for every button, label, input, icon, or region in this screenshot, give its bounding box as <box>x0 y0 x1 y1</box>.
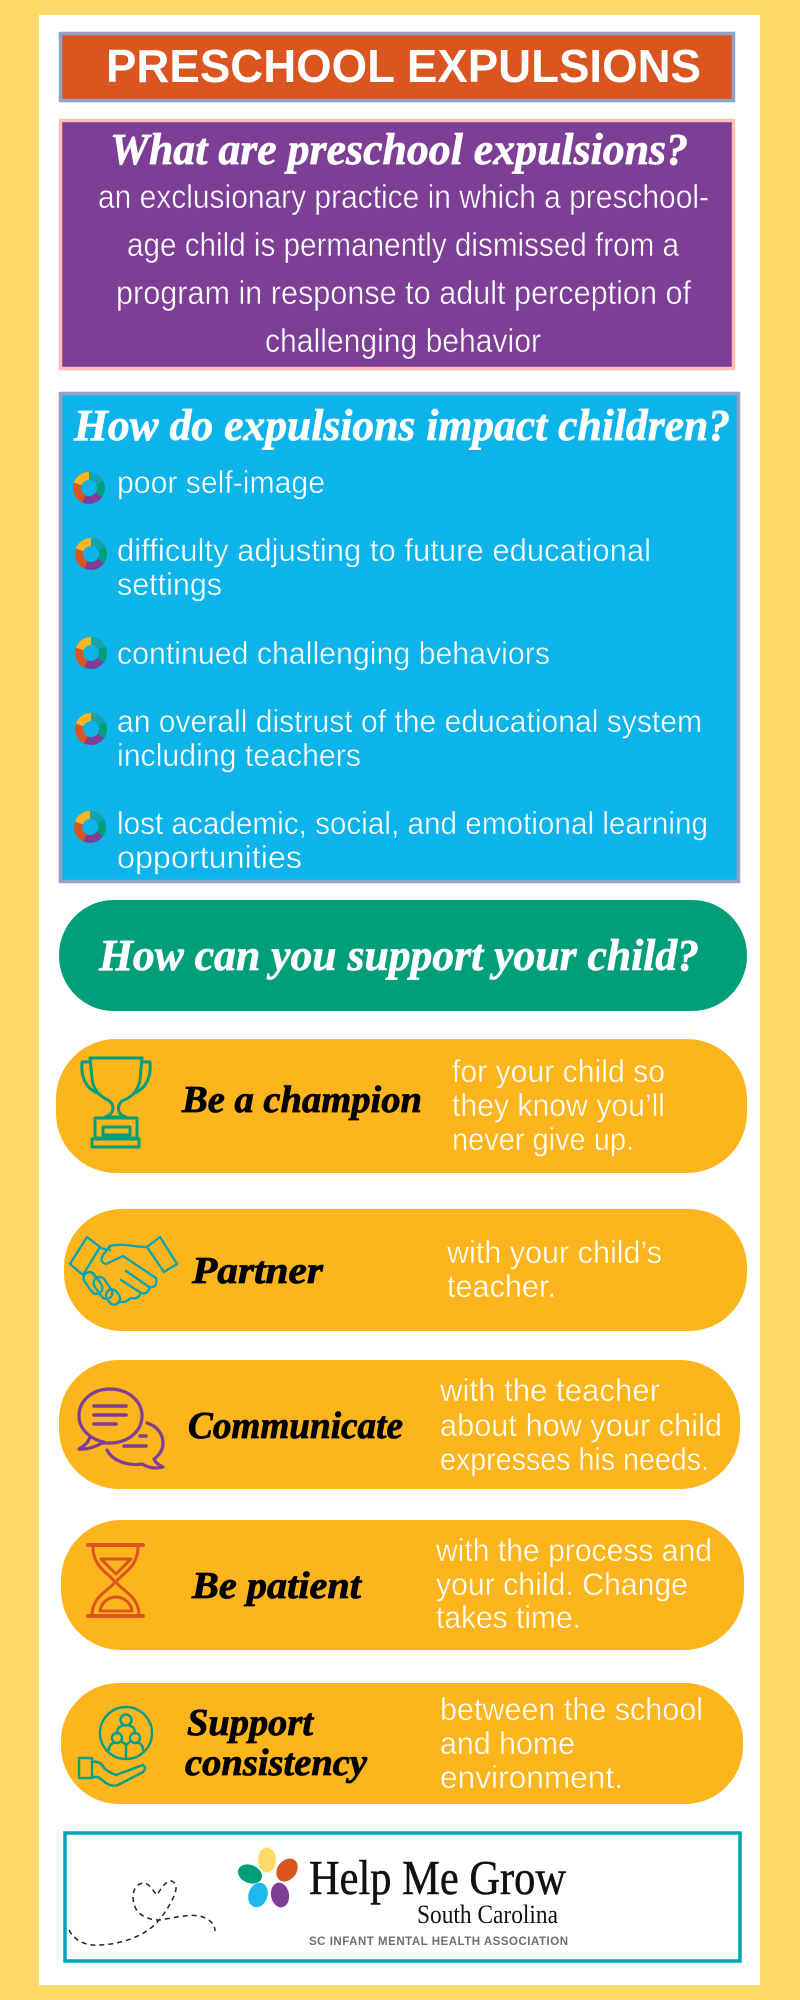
bullet: overall distrust: including teachers <box>117 737 361 773</box>
definition text <box>98 178 709 359</box>
title banner <box>60 34 734 100</box>
logo wordmark <box>309 1850 568 1948</box>
heading: how do expulsions impact children: How do expulsions impact children? <box>73 401 730 450</box>
banner: how can you support your child <box>59 900 747 1011</box>
text: between the school <box>440 1691 703 1795</box>
logo wordmark: SC INFANT MENTAL HEALTH ASSOCIATION <box>309 1936 568 1948</box>
icon: hand holding family <box>79 1707 152 1786</box>
definition text: program in response to adult perception of <box>116 274 692 311</box>
icon: trophy <box>82 1058 150 1147</box>
text: with the teacher: about how your child <box>440 1407 722 1443</box>
label: be patient: Be patient <box>191 1565 363 1607</box>
label: partner: Partner <box>191 1250 324 1292</box>
text: for your child <box>452 1053 665 1157</box>
text: for your child: they know you’ll <box>452 1087 665 1123</box>
label: support consistency <box>185 1702 367 1784</box>
banner: how can you support your child: How can you support your child? <box>98 931 699 980</box>
panel: how do expulsions impact children <box>60 394 738 882</box>
text: between the school: between the school <box>440 1691 703 1727</box>
bullet: overall distrust: an overall distrust of the educational system <box>117 703 702 739</box>
text: with the teacher: expresses his needs. <box>440 1441 709 1477</box>
text: with your child's teacher <box>446 1234 662 1304</box>
panel: footer logo <box>65 1833 740 1961</box>
label: support consistency: consistency <box>185 1742 367 1784</box>
bullet: lost opportunities <box>73 805 708 875</box>
bullet: continued challenging behaviors: continued challenging behaviors <box>117 635 550 671</box>
text: between the school: and home <box>440 1725 575 1761</box>
icon: flower logo <box>235 1848 302 1910</box>
card: be a champion <box>56 1039 747 1173</box>
label: be a champion: Be a champion <box>181 1079 422 1121</box>
definition text: an exclusionary practice in which a preschool- <box>98 178 709 215</box>
text: with the process: with the process and <box>435 1532 712 1568</box>
bullet: overall distrust <box>74 703 702 773</box>
text: with the process: takes time. <box>436 1599 581 1635</box>
icon: handshake <box>70 1237 177 1307</box>
icon: speech bubbles <box>79 1389 163 1468</box>
text: with the process: your child. Change <box>436 1566 688 1602</box>
bullet: poor self-image: poor self-image <box>117 464 325 500</box>
bullet: difficulty adjusting <box>74 532 651 602</box>
bullet: difficulty adjusting: difficulty adjusting to future educational <box>117 532 651 568</box>
bullet: lost opportunities: opportunities <box>117 839 302 875</box>
text: with your child's teacher: with your child’s <box>446 1234 662 1270</box>
card: be patient <box>61 1520 744 1650</box>
bullet: lost opportunities: lost academic, social, and emotional learning <box>117 805 708 841</box>
decoration: dashed heart <box>69 1881 215 1945</box>
text: between the school: environment. <box>440 1759 623 1795</box>
title banner: PRESCHOOL EXPULSIONS <box>106 40 701 92</box>
label: communicate: Communicate <box>188 1405 403 1447</box>
definition text: age child is permanently dismissed from a <box>127 226 680 263</box>
text: with your child's teacher: teacher. <box>447 1268 556 1304</box>
card: communicate <box>59 1360 740 1489</box>
text: with the process <box>435 1532 712 1635</box>
text: for your child: for your child so <box>452 1053 665 1089</box>
card: partner <box>64 1209 747 1331</box>
logo wordmark: Help Me Grow <box>309 1850 567 1905</box>
text: with the teacher <box>439 1372 722 1477</box>
label: support consistency: Support <box>187 1702 314 1744</box>
panel: what are preschool expulsions <box>60 120 734 368</box>
bullet: difficulty adjusting: settings <box>117 566 222 602</box>
icon: hourglass <box>88 1545 143 1616</box>
card: support consistency <box>61 1683 743 1804</box>
logo wordmark: South Carolina <box>417 1900 558 1929</box>
heading: what are preschool expulsions: What are preschool expulsions? <box>110 125 688 174</box>
text: with the teacher: with the teacher <box>439 1372 660 1408</box>
text: for your child: never give up. <box>452 1121 634 1157</box>
definition text: challenging behavior <box>265 322 541 359</box>
